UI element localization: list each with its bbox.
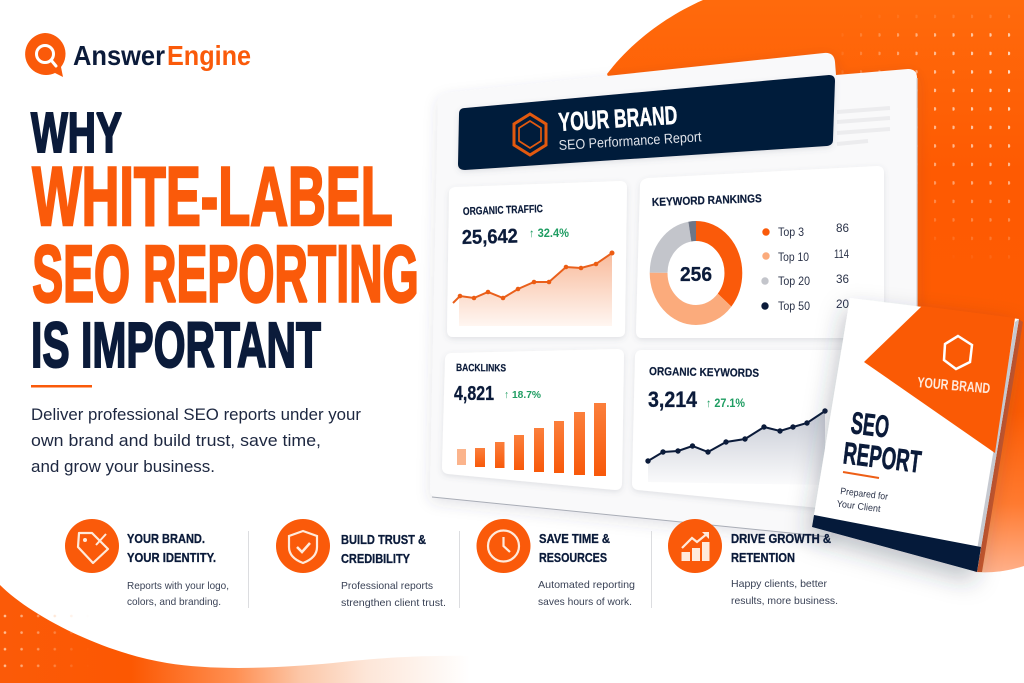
title line: SEO REPORTING: SEO REPORTING	[32, 230, 419, 320]
metric change: ↑ 32.4%	[529, 228, 569, 240]
dark footer band	[812, 515, 981, 572]
description: strengthen client trust.	[341, 597, 446, 609]
description	[127, 580, 229, 608]
logo wordmark: Answer	[73, 40, 165, 71]
icon: shield with check	[276, 519, 330, 573]
legend: Top 50	[778, 299, 810, 313]
benefit: save time	[476, 519, 635, 608]
donut chart: 256	[680, 263, 712, 286]
heading: RESOURCES	[539, 550, 607, 565]
report subtitle: SEO Performance Report	[558, 128, 702, 153]
legend: Top 3	[778, 225, 804, 239]
icon: white hexagon	[944, 336, 972, 369]
book title	[841, 405, 927, 480]
metric change: ↑ 18.7%	[504, 389, 542, 401]
legend: 36	[836, 272, 849, 286]
area line chart	[453, 250, 614, 326]
legend: 20	[836, 297, 849, 311]
heading	[539, 531, 610, 565]
description: Reports with your logo,	[127, 580, 229, 592]
heading: BUILD TRUST &	[341, 532, 426, 547]
panel bottom edge	[432, 497, 830, 537]
benefit: your brand	[65, 519, 229, 608]
intro paragraph: and grow your business.	[31, 457, 215, 476]
background: bottom-left orange wave	[0, 585, 470, 683]
background: top-right dot pattern	[842, 14, 1010, 258]
panel: organic traffic	[447, 181, 627, 337]
header banner	[458, 75, 835, 170]
heading: CREDIBILITY	[341, 551, 410, 566]
metric value: 3,214	[648, 387, 698, 412]
logo	[25, 33, 251, 77]
background: top-right orange shape	[607, 0, 1024, 572]
logo wordmark: Engine	[167, 40, 251, 71]
legend: 86	[836, 221, 849, 235]
intro paragraph: own brand and build trust, save time,	[31, 431, 321, 450]
panel body	[430, 53, 917, 537]
description: saves hours of work.	[538, 596, 632, 608]
description: colors, and branding.	[127, 596, 221, 608]
panel: organic keywords	[632, 350, 860, 512]
book cover	[812, 298, 1019, 572]
icon: growth chart	[668, 519, 722, 573]
metric change: ↑ 27.1%	[706, 398, 745, 410]
heading	[341, 532, 426, 566]
icon: clock	[476, 519, 530, 573]
book subtitle	[836, 486, 889, 516]
book spine and pages	[977, 318, 1023, 572]
background: bottom-left dot pattern	[4, 614, 73, 668]
intro paragraph	[31, 405, 361, 476]
title line: IS IMPORTANT: IS IMPORTANT	[31, 309, 321, 381]
icon: price tag	[65, 519, 119, 573]
benefit: build trust	[276, 519, 446, 609]
book title: SEO	[849, 405, 891, 445]
icon: speech bubble with magnifier	[25, 33, 66, 77]
book subtitle: Your Client	[836, 499, 881, 515]
description	[731, 578, 838, 607]
heading: SAVE TIME &	[539, 531, 610, 546]
intro paragraph: Deliver professional SEO reports under your	[31, 405, 361, 424]
card title: BACKLINKS	[456, 362, 506, 374]
description	[341, 580, 446, 609]
title	[31, 102, 419, 381]
card	[442, 349, 624, 490]
heading	[127, 531, 216, 565]
orange corner panel	[864, 306, 1015, 453]
description: Professional reports	[341, 580, 433, 592]
report booklet	[812, 298, 1023, 572]
book title: REPORT	[841, 435, 923, 480]
description: Automated reporting	[538, 579, 635, 591]
benefit: drive growth	[668, 519, 838, 607]
description: Happy clients, better	[731, 578, 828, 590]
card title: ORGANIC KEYWORDS	[649, 366, 759, 380]
card	[636, 166, 884, 338]
panel: backlinks	[442, 349, 624, 490]
brand name: YOUR BRAND	[558, 100, 678, 137]
benefits row	[65, 519, 838, 609]
card title: KEYWORD RANKINGS	[652, 193, 762, 209]
icon: brand hexagon	[514, 114, 546, 155]
card title: ORGANIC TRAFFIC	[463, 203, 543, 218]
bar chart	[457, 403, 606, 476]
heading	[731, 531, 831, 565]
heading: RETENTION	[731, 550, 795, 565]
heading: YOUR IDENTITY.	[127, 550, 216, 565]
title line: WHY: WHY	[31, 102, 122, 165]
book brand name: YOUR BRAND	[917, 375, 991, 397]
description: results, more business.	[731, 595, 838, 607]
description	[538, 579, 635, 608]
heading: DRIVE GROWTH &	[731, 531, 831, 546]
panel right edge	[916, 78, 918, 320]
decorative text lines	[837, 108, 890, 144]
card	[447, 181, 627, 337]
area line chart	[645, 408, 828, 485]
legend	[761, 221, 849, 313]
report dashboard panel	[65, 53, 1023, 609]
legend: Top 10	[778, 250, 809, 264]
heading: YOUR BRAND.	[127, 531, 205, 546]
legend: Top 20	[778, 274, 810, 288]
card	[632, 350, 860, 512]
donut chart	[659, 231, 733, 315]
book subtitle: Prepared for	[840, 486, 889, 503]
title line: WHITE-LABEL: WHITE-LABEL	[32, 149, 393, 243]
metric value: 4,821	[454, 383, 494, 405]
metric value: 25,642	[462, 226, 518, 249]
panel: keyword rankings	[636, 166, 884, 338]
legend: 114	[834, 247, 849, 261]
